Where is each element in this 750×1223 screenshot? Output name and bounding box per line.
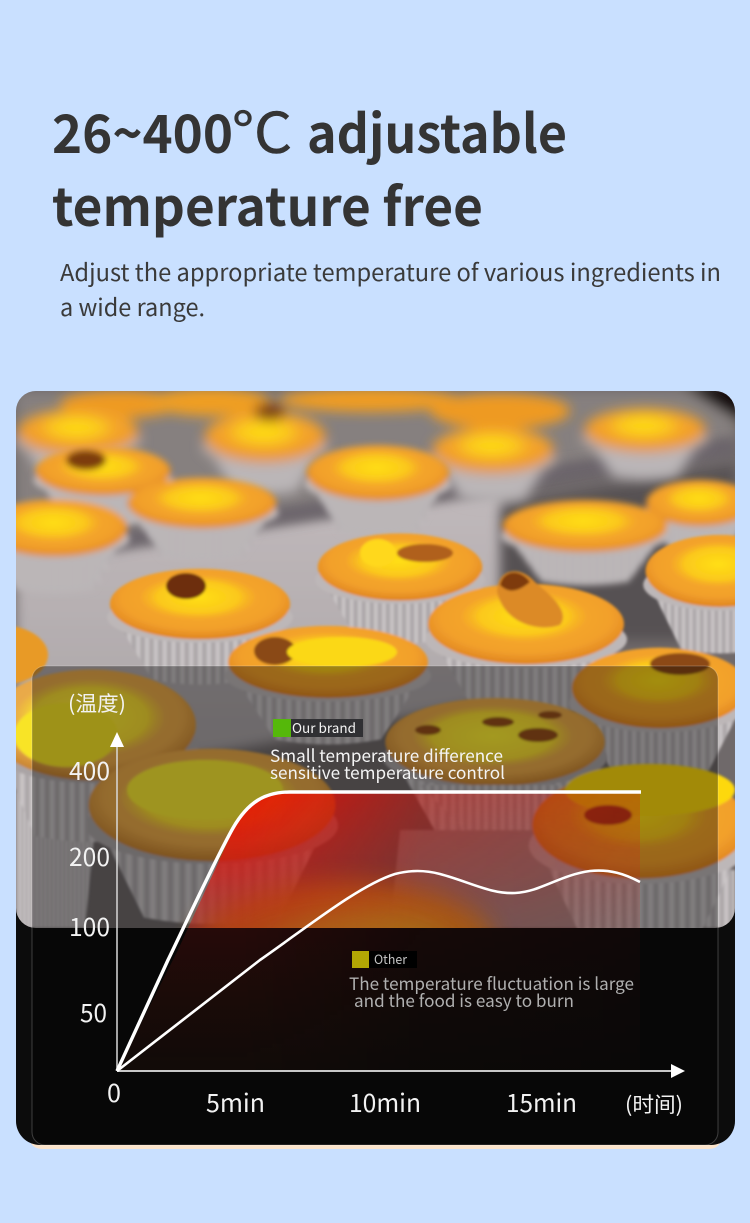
- y axis labels: 400: [69, 752, 110, 788]
- y axis labels: 200: [69, 838, 110, 874]
- subtitle text: a wide range.: [60, 289, 205, 323]
- line chart: [110, 732, 685, 1078]
- x axis labels: 10min: [349, 1084, 421, 1120]
- legend: our brand: Our brand: [292, 717, 356, 737]
- legend: other: Other: [374, 949, 408, 968]
- x axis labels: 0: [107, 1074, 121, 1110]
- callout: other: and the food is easy to burn: [354, 987, 574, 1012]
- blurred foreground tart: [186, 870, 504, 928]
- title: 26~400: [52, 93, 233, 169]
- card base: [16, 391, 735, 1149]
- panel: photo card: [0, 385, 750, 1149]
- photo: egg tarts: [16, 391, 735, 928]
- callout: other: [349, 970, 634, 1012]
- y axis labels: 50: [80, 994, 107, 1030]
- subtitle text: Adjust the appropriate temperature of various ingredients in: [60, 254, 721, 288]
- tray front wall: [16, 495, 508, 750]
- subtitle text: [60, 254, 721, 323]
- y axis labels: [68, 688, 126, 1030]
- title: adjustable: [307, 93, 567, 169]
- curve: our brand: [117, 792, 641, 1071]
- x axis labels: 5min: [206, 1084, 265, 1120]
- callout: our brand: [270, 742, 505, 784]
- title: °C: [232, 89, 292, 170]
- y axis: [110, 732, 124, 1071]
- blurred back row tarts: [15, 388, 708, 503]
- x axis labels: (时间): [625, 1089, 683, 1119]
- curve: other: [117, 871, 640, 1071]
- heat area under the brand curve: [117, 792, 640, 1071]
- x axis: [117, 1064, 685, 1078]
- legend: other: [352, 949, 417, 968]
- title: temperature free: [52, 166, 483, 242]
- x axis labels: 15min: [506, 1084, 577, 1120]
- title: [52, 89, 567, 242]
- mid row tarts: [0, 533, 750, 780]
- upper tray: [16, 385, 745, 640]
- x axis labels: [107, 1074, 683, 1120]
- panel: chart overlay: [32, 666, 718, 1145]
- callout: our brand: Small temperature difference: [270, 742, 503, 767]
- callout: other: The temperature fluctuation is large: [349, 970, 634, 995]
- y axis labels: (温度): [68, 688, 126, 718]
- y axis labels: 100: [69, 908, 110, 944]
- near row tarts: [16, 668, 735, 928]
- callout: our brand: sensitive temperature control: [270, 759, 505, 784]
